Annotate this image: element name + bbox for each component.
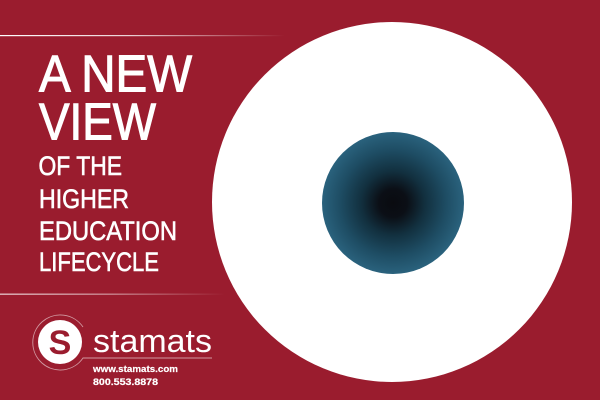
logo badge: S (49, 324, 71, 362)
stamats logo (33, 315, 212, 370)
subtitle: LIFECYCLE (39, 247, 159, 277)
logo ring (33, 315, 212, 370)
logo badge (38, 320, 82, 364)
contact details: 800.553.8878 (93, 377, 158, 388)
blue gradient circle (322, 132, 464, 274)
contact details (92, 364, 178, 388)
subtitle: OF THE (38, 151, 122, 181)
title: A NEW (39, 46, 192, 104)
title: VIEW (39, 94, 156, 152)
subtitle: EDUCATION (39, 216, 177, 246)
contact details: www.stamats.com (92, 364, 178, 375)
logo wordmark: stamats (93, 323, 212, 359)
title (39, 46, 192, 152)
white circle (212, 22, 572, 382)
subtitle: HIGHER (39, 184, 129, 214)
subtitle (38, 151, 177, 277)
